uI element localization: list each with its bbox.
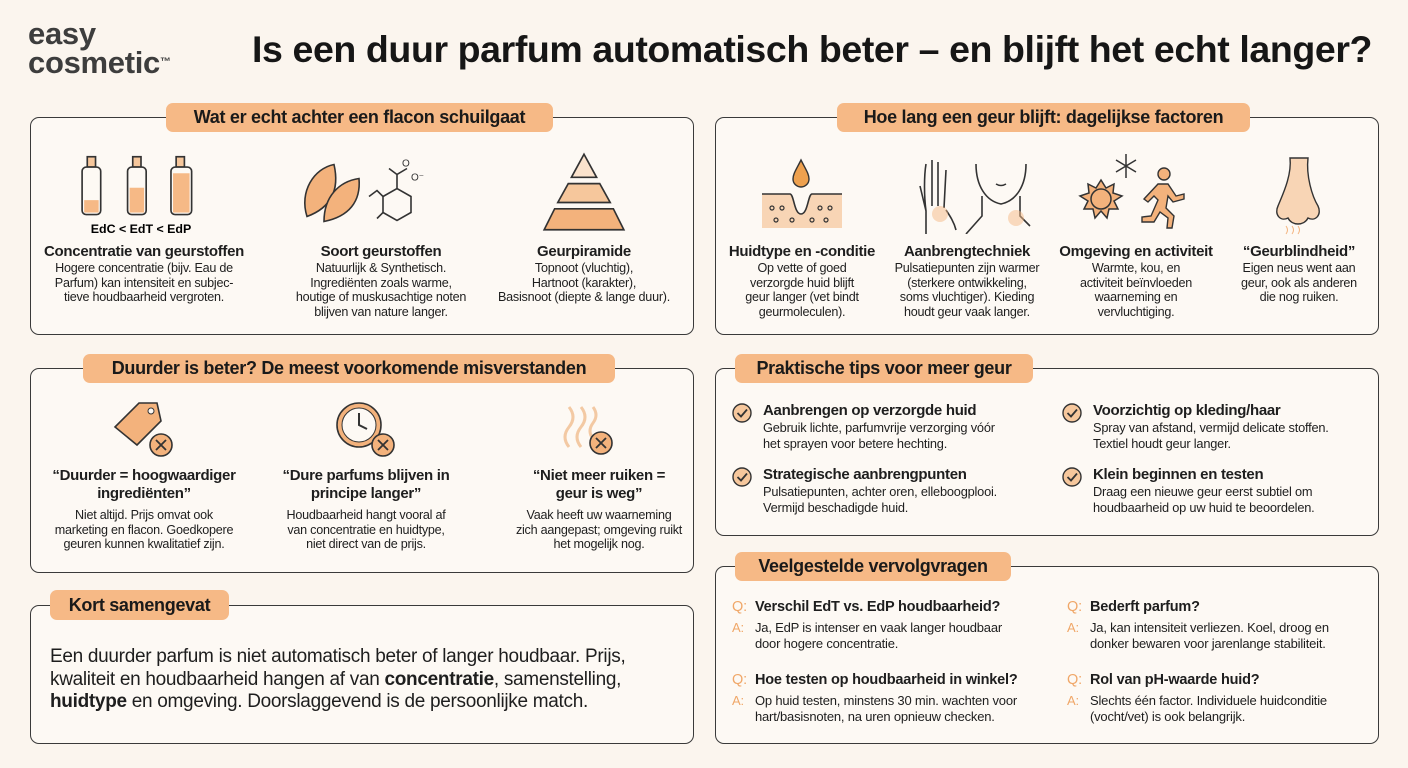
faq 4 [1067,672,1327,724]
faq 3: A: [1067,620,1079,635]
heading: factoren [837,103,1250,132]
column: soort geurstoffen: Ingrediënten zoals warme, [310,276,452,290]
column: dure parfums: van concentratie en huidtype, [287,523,445,537]
tip: klein beginnen: Klein beginnen en testen [1093,466,1263,483]
column: dure parfums: “Dure parfums blijven in [282,467,450,484]
column: duurder hoogwaardiger: Niet altijd. Prijs omvat ook [75,508,213,522]
tip: kleding: Spray van afstand, vermijd delicate stoffen. [1093,420,1329,435]
column: concentratie: Hogere concentratie (bijv. Eau de [55,261,233,275]
tip: aanbrengpunten: Vermijd beschadigde huid. [763,500,908,514]
column: soort geurstoffen [296,243,466,319]
column: soort geurstoffen: Soort geurstoffen [321,243,441,260]
column: omgeving: waarneming en [1095,290,1177,304]
faq 1: Q: [732,599,747,615]
icon: bottles: EdC < EdT < EdP [91,222,191,236]
column: dure parfums: Houdbaarheid hangt vooral af [287,508,445,522]
column: niet meer ruiken: “Niet meer ruiken = [533,467,665,484]
heading: misverstanden: Duurder is beter? De meest voorkomende misverstanden [112,358,586,378]
tip: aanbrengpunten [732,466,997,514]
faq 3 [1067,599,1329,650]
icon: leaves and molecule: O [402,158,410,170]
column: aanbrengtechniek: houdt geur vaak langer. [904,305,1030,319]
column: concentratie: Concentratie van geurstoffen [44,243,244,260]
heading: factoren: Hoe lang een geur blijft: dagelijkse factoren [864,107,1223,127]
column: concentratie: tieve houdbaarheid vergroten. [64,290,224,304]
column: huidtype: verzorgde huid blijft [750,276,854,290]
column: duurder hoogwaardiger: geuren kunnen kwalitatief zijn. [64,537,224,551]
summary text [50,646,625,712]
icon: fading scent [564,406,613,455]
icon: hand and neck [919,160,1030,234]
faq 4: Q: [1067,672,1082,688]
panel: kort samengevat [30,605,694,744]
panel: dagelijkse factoren [715,117,1379,335]
tip: aanbrengpunten: Pulsatiepunten, achter oren, elleboogplooi. [763,484,997,499]
faq 1: Ja, EdP is intenser en vaak langer houdbaar [755,620,1002,635]
heading: misverstanden [83,354,615,383]
column: duurder hoogwaardiger: “Duurder = hoogwaardiger [52,467,236,484]
icon: sun snowflake runner [1078,154,1185,229]
faq 4: (vocht/vet) is ook belangrijk. [1090,708,1245,724]
tip: verzorgde huid: het sprayen voor betere hechting. [763,436,947,450]
column: aanbrengtechniek: soms vluchtiger). Kieding [900,290,1034,304]
tip: klein beginnen [1062,466,1315,514]
icon: pyramid [542,152,626,231]
panel: faq [715,566,1379,744]
column: huidtype: Huidtype en -conditie [729,243,875,260]
column: geurblindheid: geur, ook als anderen [1241,276,1357,290]
column: aanbrengtechniek [895,243,1040,319]
column: duurder hoogwaardiger [52,467,236,551]
panel: wat er echt achter een flacon schuilgaat [30,117,694,335]
column: geurblindheid: die nog ruiken. [1260,290,1338,304]
tip: verzorgde huid [732,402,995,450]
faq 4: Rol van pH-waarde huid? [1090,672,1259,688]
column: niet meer ruiken [516,467,682,551]
faq 2: Q: [732,672,747,688]
column: dure parfums: principe langer” [311,485,421,502]
column: duurder hoogwaardiger: ingrediënten” [97,485,191,502]
column: huidtype: Op vette of goed [757,261,847,275]
faq 2: A: [732,693,744,708]
faq 4: Slechts één factor. Individuele huidconditie [1090,693,1327,708]
column: soort geurstoffen: blijven van nature langer. [314,305,448,319]
logo: cosmetic™ [28,45,171,80]
column: omgeving: vervluchtiging. [1098,305,1174,319]
panel: misverstanden [30,368,694,573]
heading: faq [735,552,1011,581]
tip: kleding: Voorzichtig op kleding/haar [1093,402,1280,419]
faq 2: Hoe testen op houdbaarheid in winkel? [755,672,1018,688]
column: geurpiramide: Hartnoot (karakter), [532,276,636,290]
summary text: Een duurder parfum is niet automatisch beter of langer houdbaar. Prijs, [50,646,625,667]
heading: tips: Praktische tips voor meer geur [756,358,1012,378]
tip: klein beginnen: Draag een nieuwe geur eerst subtiel om [1093,484,1312,499]
column: niet meer ruiken: Vaak heeft uw waarneming [526,508,671,522]
column: niet meer ruiken: geur is weg” [556,485,642,502]
faq 4: A: [1067,693,1079,708]
column: omgeving: Warmte, kou, en [1092,261,1180,275]
faq 3: Q: [1067,599,1082,615]
column: concentratie: Parfum) kan intensiteit en subjec- [55,276,233,290]
column: duurder hoogwaardiger: marketing en flacon. Goedkopere [55,523,233,537]
icon: skin drop [762,158,842,228]
tip: klein beginnen: houdbaarheid op uw huid te beoordelen. [1093,500,1315,514]
tip: kleding [1062,402,1329,450]
tip: aanbrengpunten: Strategische aanbrengpunten [763,466,967,483]
summary text: kwaliteit en houdbaarheid hangen af van concentratie, samenstelling, [50,669,621,690]
column: huidtype [729,243,875,319]
logo: easy [28,16,96,51]
column: geurblindheid: “Geurblindheid” [1243,243,1355,260]
icon: price tag [114,402,173,457]
column: geurpiramide [498,243,670,304]
title: Is een duur parfum automatisch beter – en blijft het echt langer? [252,28,1372,70]
icon: leaves and molecule [304,158,424,222]
column: soort geurstoffen: Natuurlijk & Synthetisch. [316,261,446,275]
column: aanbrengtechniek: Aanbrengtechniek [904,243,1030,260]
tip: kleding: Textiel houdt geur langer. [1093,436,1231,450]
faq 3: Ja, kan intensiteit verliezen. Koel, droog en [1090,620,1329,635]
faq 3: donker bewaren voor jarenlange stabiliteit. [1090,636,1326,650]
heading: flacon [166,103,553,132]
faq 2: hart/basisnoten, na uren opnieuw checken. [755,708,995,724]
icon: clock [336,402,395,457]
faq 3: Bederft parfum? [1090,599,1200,615]
panel: praktische tips [715,368,1379,536]
column: omgeving: activiteit beïnvloeden [1080,276,1192,290]
icon: bottles [81,156,192,236]
icon: nose [1276,157,1320,234]
summary text: huidtype en omgeving. Doorslaggevend is de persoonlijke match. [50,691,588,712]
faq 1: A: [732,620,744,635]
column: niet meer ruiken: het mogelijk nog. [554,537,644,551]
column: geurpiramide: Geurpiramide [537,243,631,260]
column: geurblindheid: Eigen neus went aan [1243,261,1355,275]
faq 1: Verschil EdT vs. EdP houdbaarheid? [755,599,1000,615]
tip: verzorgde huid: Gebruik lichte, parfumvrije verzorging vóór [763,420,995,435]
faq 1: door hogere concentratie. [755,636,898,650]
column: aanbrengtechniek: (sterkere ontwikkeling, [907,276,1027,290]
column: concentratie [44,243,244,304]
column: soort geurstoffen: houtige of muskusachtige noten [296,290,466,304]
column: omgeving [1059,243,1213,319]
tip: verzorgde huid: Aanbrengen op verzorgde huid [763,402,976,419]
faq 2 [732,672,1018,724]
heading: faq: Veelgestelde vervolgvragen [758,556,988,576]
heading: samengevat [50,590,229,620]
column: dure parfums: niet direct van de prijs. [306,537,426,551]
heading: samengevat: Kort samengevat [69,595,210,615]
column: geurblindheid [1241,243,1357,304]
faq 2: Op huid testen, minstens 30 min. wachten voor [755,693,1017,708]
heading: flacon: Wat er echt achter een flacon schuilgaat [194,107,525,127]
column: dure parfums [282,467,450,551]
column: geurpiramide: Topnoot (vluchtig), [535,261,633,275]
icon: leaves and molecule: O⁻ [411,172,424,184]
column: omgeving: Omgeving en activiteit [1059,243,1213,260]
heading: tips [735,354,1033,383]
column: niet meer ruiken: zich aangepast; omgeving ruikt [516,523,682,537]
column: aanbrengtechniek: Pulsatiepunten zijn warmer [895,261,1039,275]
logo [28,16,171,80]
column: geurpiramide: Basisnoot (diepte & lange duur). [498,290,670,304]
column: huidtype: geur langer (vet bindt [745,290,859,304]
faq 1 [732,599,1002,650]
column: huidtype: geurmoleculen). [759,305,845,319]
